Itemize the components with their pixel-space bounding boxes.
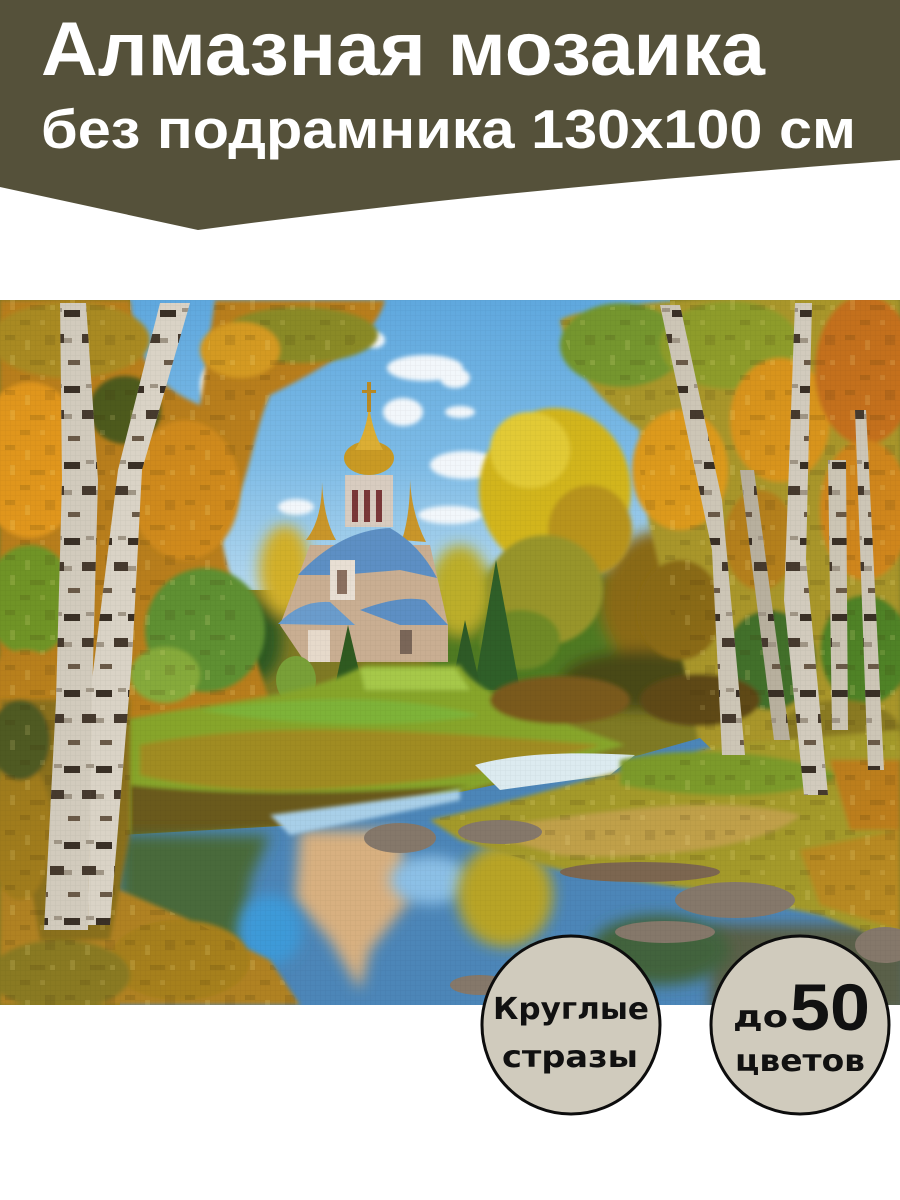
left foliage: [0, 300, 385, 730]
badge: up to 50 colors: до: [733, 1000, 788, 1035]
subtitle: без подрамника 130х100 см: [41, 98, 856, 160]
badge: round rhinestones: Круглые: [493, 992, 649, 1027]
badge: round rhinestones: стразы: [502, 1040, 638, 1075]
small trees: [276, 560, 520, 704]
right bank: [430, 730, 900, 945]
title: Алмазная мозаика: [41, 7, 766, 92]
central yellow tree: [479, 408, 632, 670]
header banner: [0, 0, 900, 230]
left bank foliage: [0, 700, 300, 1010]
base tones: [0, 300, 900, 1005]
river stones: [364, 820, 900, 995]
badge: up to 50 colors: 50: [790, 970, 870, 1044]
badge: round rhinestones: [482, 936, 660, 1114]
right foliage: [560, 295, 900, 760]
river: [120, 738, 900, 1015]
birch trunks: [44, 303, 884, 930]
meadow: [125, 665, 630, 835]
badge: up to 50 colors: цветов: [735, 1044, 865, 1079]
background forest: [234, 525, 760, 710]
painting: church in autumn birch forest: [0, 295, 900, 1015]
sky: [130, 300, 670, 590]
church: [278, 382, 448, 662]
badge: up to 50 colors: [711, 936, 889, 1114]
